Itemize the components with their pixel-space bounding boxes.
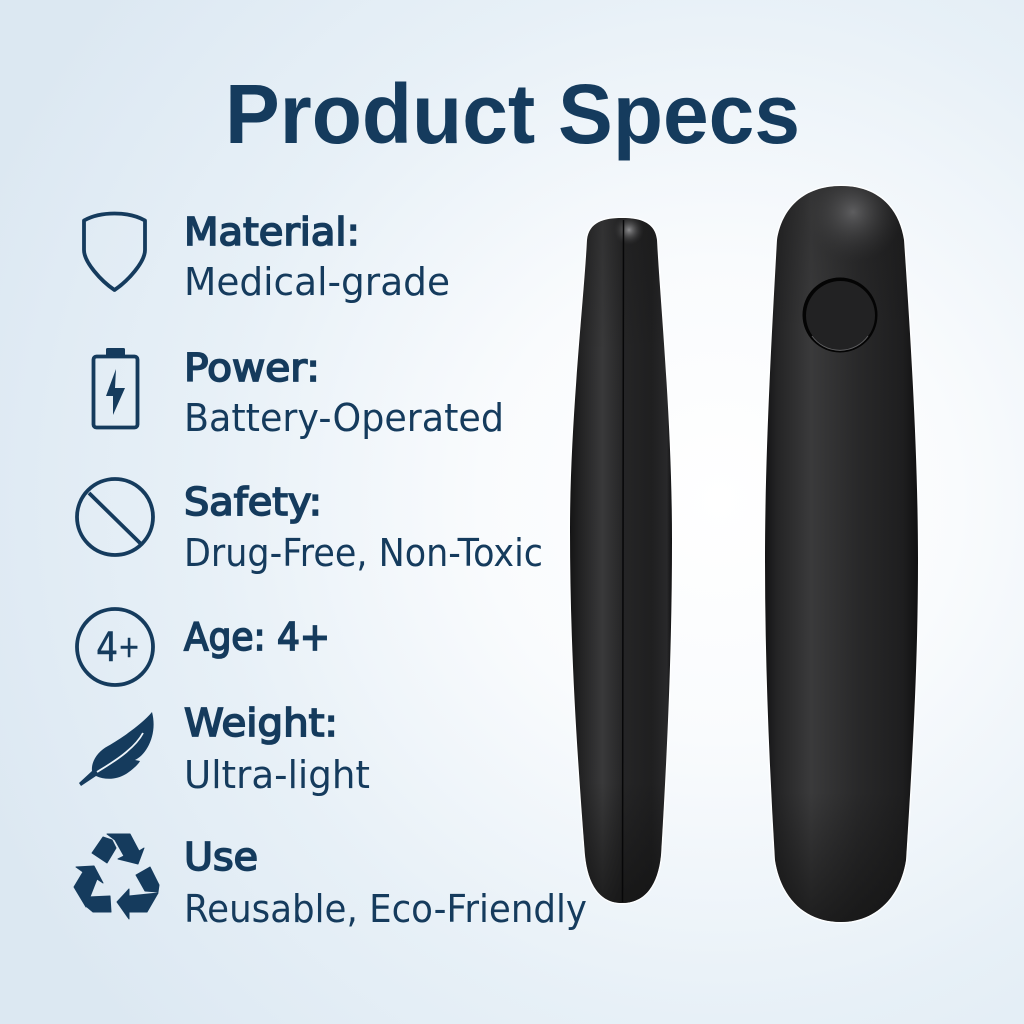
spec: weight: Weight: xyxy=(184,701,338,745)
product: front view xyxy=(760,162,922,926)
icon: shield xyxy=(84,214,145,290)
spec: safety: Safety: xyxy=(184,480,322,524)
spec: use: Reusable, Eco-Friendly xyxy=(184,887,587,931)
spec: material xyxy=(184,210,450,304)
spec: material: Material: xyxy=(184,210,360,254)
button xyxy=(802,278,878,352)
icon: age 4+: 4 xyxy=(96,625,121,671)
spec: material: Medical-grade xyxy=(184,260,450,304)
icon: feather xyxy=(79,712,154,786)
spec: power: Battery-Operated xyxy=(184,396,504,440)
icon: recycle xyxy=(74,834,159,919)
product: side view xyxy=(565,215,677,907)
icon: age 4+: + xyxy=(118,630,140,665)
spec: use xyxy=(184,835,587,931)
spec: safety xyxy=(184,480,543,575)
icon: prohibition sign xyxy=(77,479,153,555)
title: Product Specs xyxy=(225,67,800,161)
icon: age 4+ xyxy=(77,609,153,685)
spec: weight: Ultra-light xyxy=(184,753,370,797)
spec: use: Use xyxy=(184,835,258,879)
spec: power xyxy=(184,346,504,440)
spec: weight xyxy=(184,701,370,797)
spec: age: Age: 4+ xyxy=(184,615,330,659)
icon: battery xyxy=(94,348,138,428)
spec: safety: Drug-Free, Non-Toxic xyxy=(184,531,543,575)
spec: power: Power: xyxy=(184,346,320,390)
